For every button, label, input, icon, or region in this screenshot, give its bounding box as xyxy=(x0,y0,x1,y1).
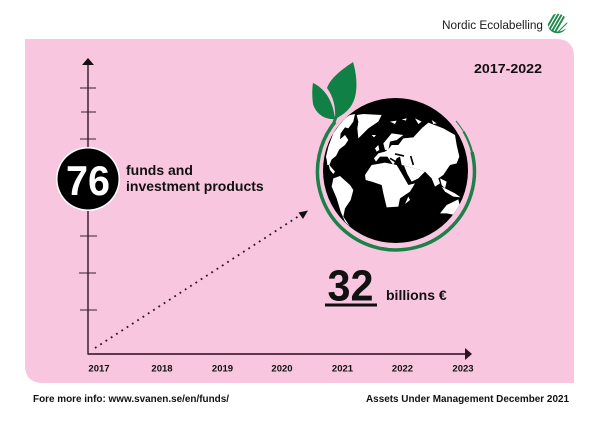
year labels xyxy=(88,364,474,374)
Arabia xyxy=(404,166,425,182)
small leaf xyxy=(312,83,335,119)
globe xyxy=(323,98,468,243)
funds text: funds and xyxy=(126,162,193,178)
year labels: 2020 xyxy=(271,364,293,374)
Iceland xyxy=(372,135,376,137)
year labels: 2021 xyxy=(332,364,354,374)
SE Asia islands xyxy=(442,187,461,197)
logo: Nordic Ecolabelling xyxy=(442,14,568,34)
underline xyxy=(325,304,377,306)
stat: 32 billions xyxy=(325,262,447,310)
Eurasia xyxy=(374,123,459,187)
Central America xyxy=(328,164,335,174)
funds text: investment products xyxy=(126,178,264,194)
arrow: dotted growth line xyxy=(95,210,308,348)
year labels: 2022 xyxy=(392,364,413,374)
Scandinavia xyxy=(383,133,403,150)
green ring xyxy=(317,117,474,250)
y axis xyxy=(79,58,97,354)
Greenland xyxy=(357,114,382,138)
panel: pink background xyxy=(25,39,574,383)
year labels: 2017 xyxy=(88,364,110,374)
unit: billions € xyxy=(386,287,447,303)
big leaf xyxy=(327,62,356,119)
illustration: globe with leaves xyxy=(312,62,474,250)
heading: period: 2017-2022 xyxy=(474,61,542,76)
South America xyxy=(332,176,353,227)
chart: axes xyxy=(79,58,474,374)
year labels: 2019 xyxy=(212,364,233,374)
footer: more info: Fore more info: www.svanen.se/en/funds/ xyxy=(33,394,229,405)
Arctic islands xyxy=(390,121,397,124)
callout: 76 funds xyxy=(56,147,264,211)
North America xyxy=(326,114,355,165)
value: 32: 32 xyxy=(328,262,374,310)
badge: 76 xyxy=(56,147,120,211)
year labels: 2023 xyxy=(452,364,474,374)
year labels: 2018 xyxy=(151,364,173,374)
footer: source note: Assets Under Management December 2021 xyxy=(366,394,569,405)
Australia xyxy=(440,199,460,215)
Britain xyxy=(375,145,379,152)
x axis xyxy=(88,348,472,360)
Madagascar xyxy=(405,197,410,204)
Africa xyxy=(365,163,415,207)
Indochina xyxy=(440,178,447,188)
inland seas xyxy=(390,154,413,165)
logo wordmark: Nordic Ecolabelling xyxy=(442,18,543,32)
icon: swan label xyxy=(548,14,568,34)
badge: 76: 76 xyxy=(66,157,110,204)
